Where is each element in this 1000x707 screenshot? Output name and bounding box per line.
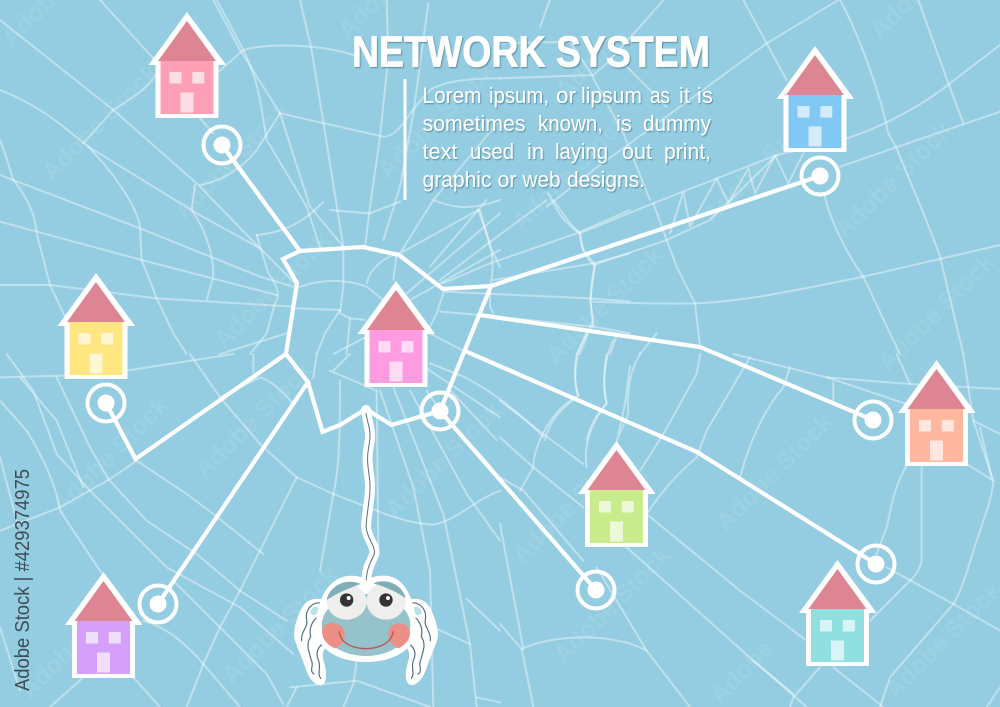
spider thread	[366, 410, 374, 585]
stock watermarks: Adobe Stock	[189, 356, 317, 484]
stock watermarks: Adobe Stock	[696, 101, 824, 229]
right legs	[400, 599, 438, 685]
stock watermarks: Adobe Stock	[168, 96, 296, 224]
body text: graphic	[422, 167, 492, 192]
body text: laying	[555, 139, 608, 164]
stock watermarks: Adobe Stock	[829, 116, 957, 244]
line to peach house node	[480, 315, 873, 420]
network connection lines	[106, 145, 876, 604]
node: peach house	[854, 402, 892, 438]
left legs	[294, 599, 332, 685]
title: NETWORK SYSTEM	[352, 28, 710, 76]
stock watermarks: Adobe Stock	[710, 408, 838, 536]
central network ring	[283, 247, 491, 432]
node: purple house	[140, 586, 176, 622]
body text: print,	[664, 139, 711, 164]
body text	[422, 83, 713, 192]
stock watermarks: Adobe Stock	[36, 58, 164, 186]
body text: out	[622, 139, 652, 164]
stock watermarks: Adobe Stock	[548, 541, 676, 669]
body text: used	[470, 139, 514, 164]
vertical rule	[404, 79, 406, 200]
line to pink house node	[222, 145, 300, 251]
line to blue house node	[491, 176, 820, 286]
cheeks	[322, 623, 410, 648]
line to green house node	[440, 411, 596, 590]
stock watermarks: Adobe Stock	[46, 391, 174, 519]
line to purple house node	[158, 382, 308, 604]
body text: dummy	[643, 111, 711, 136]
stock watermarks: Adobe Stock	[540, 241, 668, 369]
house: green	[578, 441, 655, 547]
node: pink house	[204, 126, 240, 164]
spider	[294, 576, 438, 685]
house: teal	[799, 560, 876, 666]
stock watermarks: Adobe Stock	[216, 561, 344, 689]
house: yellow	[58, 273, 134, 379]
stock watermarks: Adobe Stock	[872, 248, 1000, 376]
stock watermarks: Adobe Stock	[506, 108, 634, 236]
body text: Lorem	[422, 83, 482, 108]
stock watermarks: Adobe Stock	[372, 56, 500, 184]
body text: known,	[538, 111, 603, 136]
body	[316, 576, 416, 662]
house: blue	[776, 46, 854, 152]
body text: designs.	[567, 167, 645, 192]
body text: web	[522, 167, 560, 192]
body text: is	[616, 111, 632, 136]
stock watermarks: Adobe	[14, 629, 89, 704]
line to teal house node	[465, 351, 876, 564]
stock watermarks: Adobe	[549, 29, 624, 104]
node: centre	[422, 392, 458, 430]
house: magenta centre	[358, 281, 434, 387]
smile	[339, 632, 393, 649]
node: yellow house	[88, 384, 124, 422]
body text: is	[697, 83, 713, 108]
body text: or	[556, 83, 576, 108]
line to yellow house node	[106, 354, 286, 459]
stock watermarks: Adobe Stock	[506, 441, 634, 569]
body text: sometimes	[422, 111, 526, 136]
stock watermarks: Adobe Stock	[379, 396, 507, 524]
body text: lipsum	[581, 83, 642, 108]
body text: or	[498, 167, 516, 192]
eyelids	[327, 581, 406, 600]
node: blue house	[802, 158, 838, 194]
node: teal house	[858, 546, 894, 582]
stock id label: Adobe Stock | #429374975	[11, 469, 34, 691]
body text: as	[650, 83, 670, 108]
node: green house	[578, 572, 614, 608]
house: peach	[898, 360, 975, 466]
eyes	[327, 582, 406, 620]
stock watermarks: Adobe Stock	[208, 226, 336, 354]
body text: in	[527, 139, 544, 164]
body text: text	[422, 139, 458, 164]
stock watermarks: Adobe	[704, 634, 779, 707]
house: purple	[65, 572, 142, 678]
body text: it	[679, 83, 690, 108]
house: pink	[148, 12, 226, 118]
body text: ipsum,	[489, 83, 549, 108]
